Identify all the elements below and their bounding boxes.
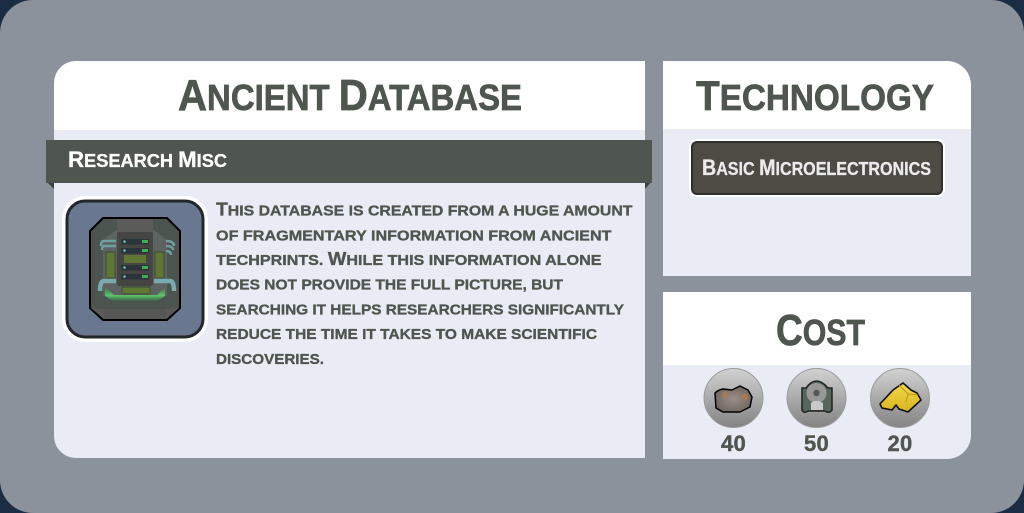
description text: TECHPRINTS. WHILE THIS INFORMATION ALONE (216, 248, 602, 269)
cost panel body (663, 364, 971, 459)
icon: gold ingots (870, 368, 930, 428)
description text: DISCOVERIES. (216, 351, 324, 368)
main panel body (54, 129, 645, 458)
cost values (721, 431, 913, 456)
cost heading: COST (776, 306, 865, 355)
chip: required technology (689, 139, 945, 197)
cost values: 40 (721, 431, 746, 456)
technology panel header (663, 61, 971, 129)
icon: electronic component (787, 368, 846, 428)
banner: category (46, 140, 652, 189)
description text: SEARCHING IT HELPS RESEARCHERS SIGNIFICANTLY (216, 302, 624, 318)
title: ANCIENT DATABASE (178, 71, 522, 120)
panel: technology (663, 61, 971, 276)
panel: main description (46, 61, 652, 458)
icon: ancient database server (62, 196, 208, 342)
technology panel body (663, 129, 971, 276)
cost panel header (663, 292, 971, 365)
description text (216, 199, 633, 368)
panel: cost (663, 292, 971, 459)
main panel header (54, 61, 645, 130)
chip label: BASIC MICROELECTRONICS (702, 155, 931, 180)
description text: THIS DATABASE IS CREATED FROM A HUGE AMOUNT (216, 199, 633, 220)
cost values: 20 (887, 431, 913, 456)
icon: stone (704, 368, 763, 428)
banner label: RESEARCH MISC (68, 147, 227, 172)
description text: REDUCE THE TIME IT TAKES TO MAKE SCIENTIFIC (216, 326, 597, 343)
description text: OF FRAGMENTARY INFORMATION FROM ANCIENT (216, 227, 612, 244)
description text: DOES NOT PROVIDE THE FULL PICTURE, BUT (216, 277, 564, 294)
cost values: 50 (804, 431, 829, 456)
technology heading: TECHNOLOGY (696, 72, 934, 119)
